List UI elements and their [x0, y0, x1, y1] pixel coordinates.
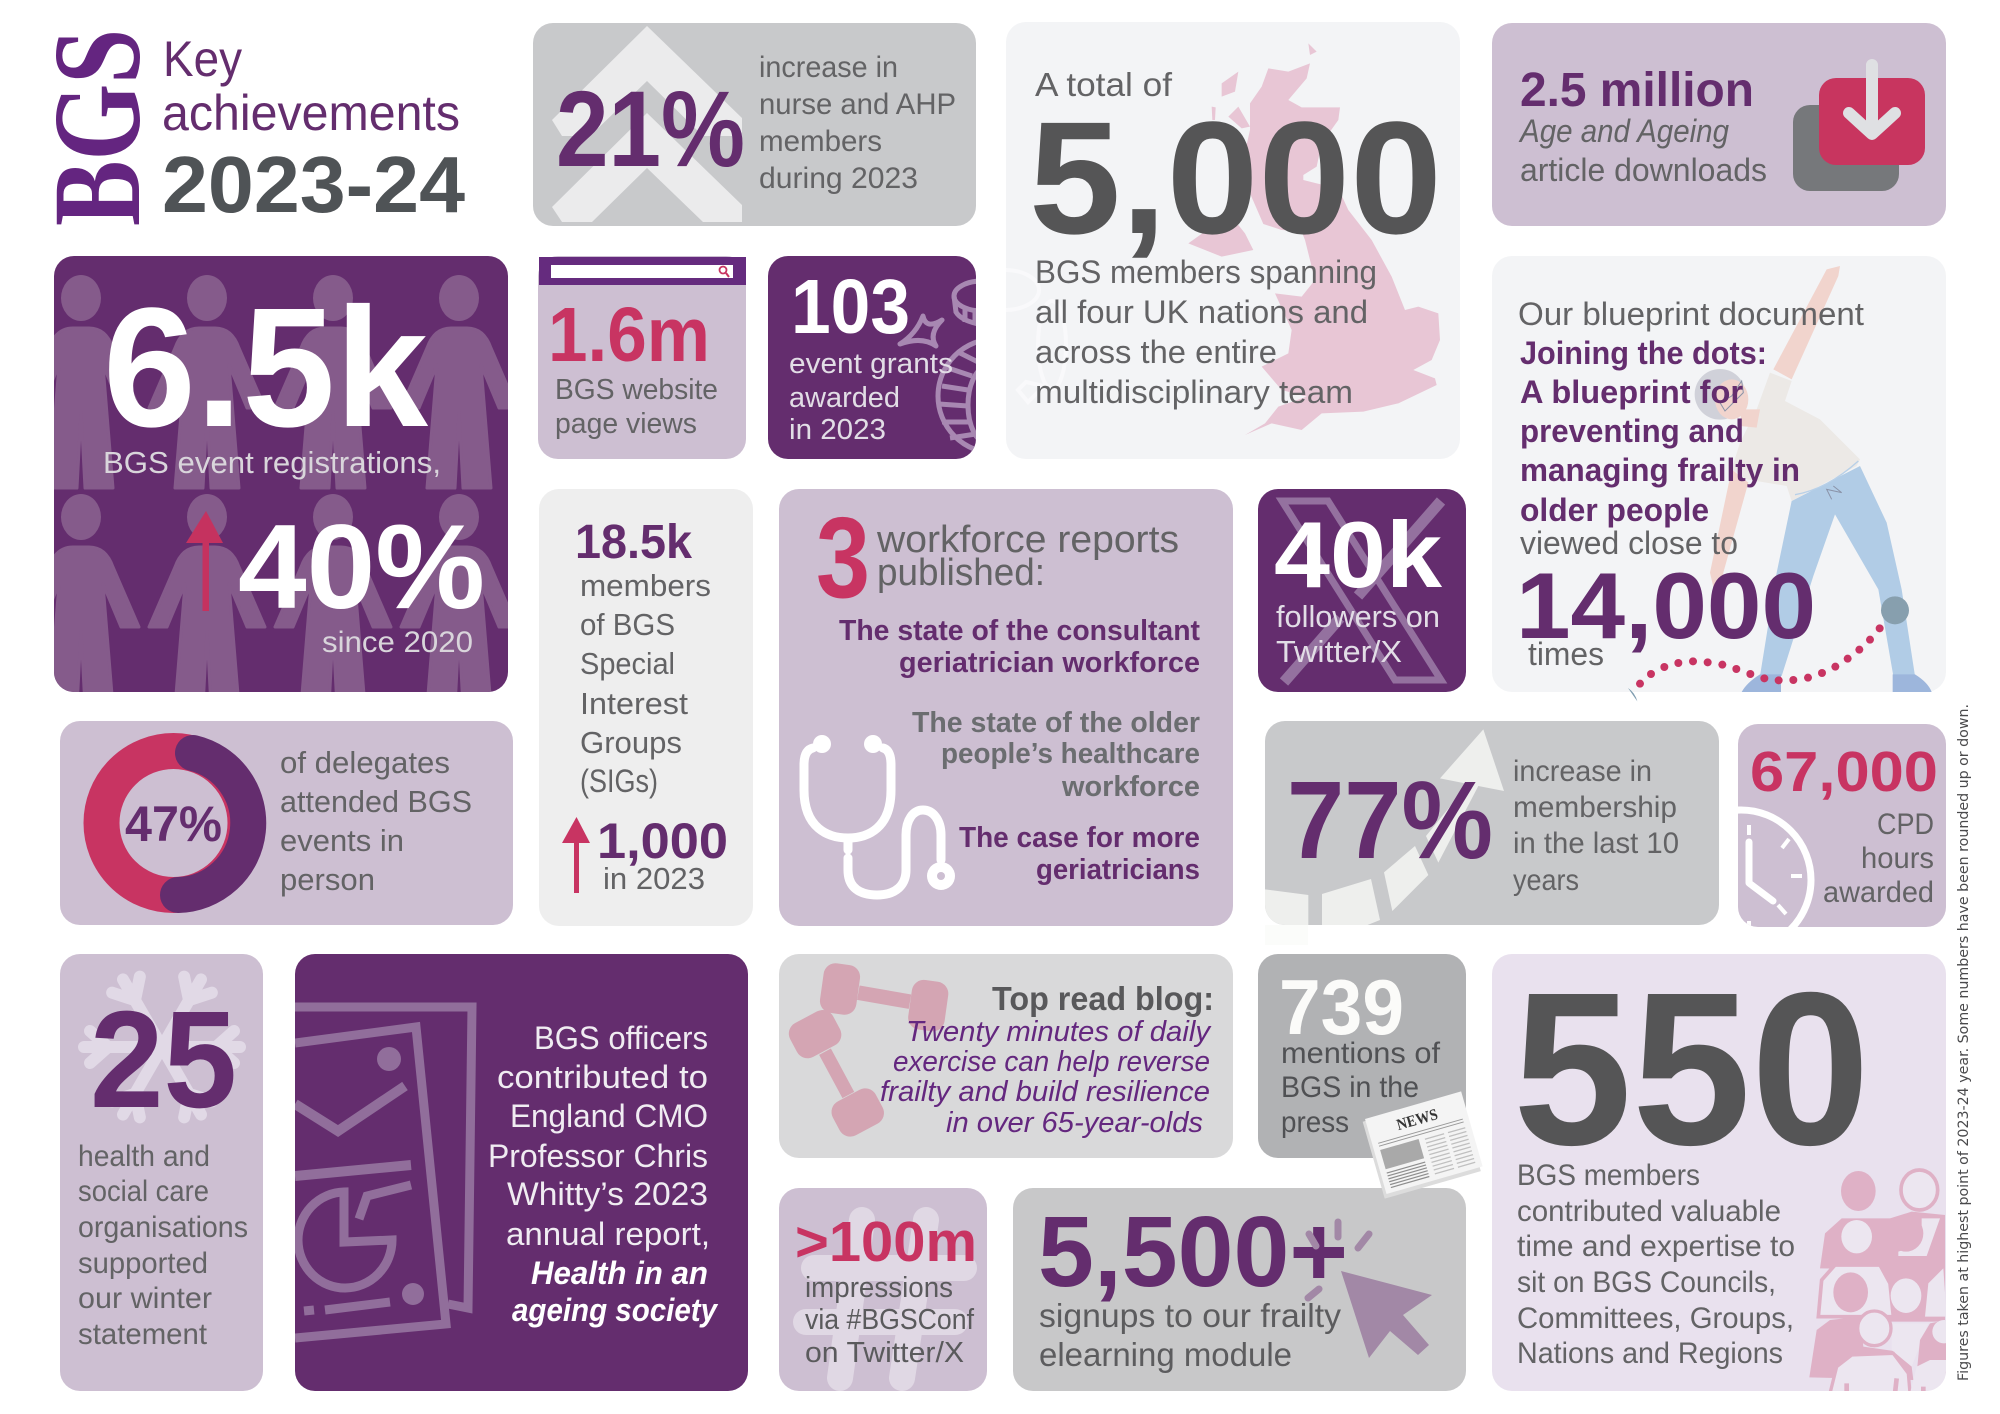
icon: report documents	[295, 1007, 472, 1338]
text: report titles: workforce	[1061, 771, 1200, 803]
icon: hashtag	[806, 1220, 964, 1378]
text: increase description: during 2023	[759, 162, 918, 195]
text: event grants label: event grants	[789, 348, 953, 380]
panel: 550 members contributing	[1492, 948, 1956, 1393]
text: page views label: BGS website	[555, 374, 718, 406]
icon: cursor click	[1308, 1222, 1432, 1358]
stat: >100m: >100m	[795, 1210, 977, 1274]
text: membership description: membership	[1513, 791, 1677, 824]
stat: 550: 550	[1513, 948, 1870, 1191]
text: blueprint intro: Our blueprint document	[1518, 296, 1864, 332]
text: blog title: frailty and build resilience	[880, 1076, 1210, 1108]
title	[162, 31, 466, 229]
icon: snowflake	[84, 971, 240, 1123]
icon: coins and sparkle	[898, 278, 976, 451]
text: CMO report description: Whitty’s 2023	[507, 1176, 708, 1212]
panel: 67,000 CPD hours	[1738, 724, 1946, 927]
icon: faint coin continuation	[971, 270, 1066, 402]
text: page views label: page views	[555, 408, 697, 440]
text: members description: across the entire	[1035, 334, 1277, 370]
text: reports heading	[876, 519, 1179, 594]
panel: top read blog	[779, 954, 1233, 1158]
icon: upward chevrons	[552, 26, 742, 222]
text: report title	[512, 1255, 719, 1328]
icon: people pattern	[23, 275, 517, 707]
stat: 14,000: 14,000	[1516, 553, 1816, 658]
icon: browser search bar	[539, 257, 746, 285]
text: registrations label: BGS event registrations,	[103, 445, 441, 480]
chart: donut 47%	[102, 751, 248, 895]
stat: 5,000: 5,000	[1029, 88, 1442, 267]
text: SIG description: Special	[580, 646, 675, 681]
text: reports heading: workforce reports	[876, 519, 1179, 561]
text: council description	[1517, 1159, 1795, 1370]
icon: clock	[1738, 806, 1814, 927]
panel: >100m impressions	[779, 1188, 987, 1391]
text: viewed close to: viewed close to	[1520, 525, 1738, 561]
text: delegates description: person	[280, 862, 375, 897]
text: blueprint title: older people	[1520, 492, 1709, 528]
stat: 1.6m: 1.6m	[548, 292, 710, 378]
text: CMO report description: Professor Chris	[488, 1138, 708, 1174]
text: CMO report description: contributed to	[497, 1059, 708, 1095]
text: organisations description	[78, 1140, 248, 1351]
text: CPD label: hours	[1861, 842, 1934, 875]
text: impressions label: on Twitter/X	[805, 1337, 964, 1369]
icon: newspaper	[1362, 1091, 1484, 1199]
text: times: times	[1528, 636, 1604, 672]
text: increase description: increase in	[759, 51, 898, 84]
text: increase description	[759, 51, 956, 195]
text: membership description	[1513, 755, 1679, 897]
panel: 25 organisations	[60, 954, 263, 1391]
text: organisations description: social care	[78, 1175, 209, 1208]
text: event grants label	[789, 348, 953, 446]
text: blueprint title: A blueprint for	[1520, 374, 1743, 410]
stat: 5,500+: 5,500+	[1038, 1196, 1348, 1308]
text: council description: sit on BGS Councils,	[1517, 1266, 1776, 1299]
text: followers label: followers on	[1276, 599, 1440, 634]
stat: 40k: 40k	[1274, 502, 1443, 607]
text: delegates description: of delegates	[280, 745, 450, 780]
stat: 6.5k: 6.5k	[103, 273, 428, 463]
text: SIG description: Interest	[580, 686, 688, 721]
text: impressions label	[805, 1272, 975, 1369]
text: followers label	[1276, 599, 1440, 669]
text: blog title	[880, 1016, 1212, 1139]
panel: 77% membership increase	[1265, 721, 1719, 945]
text: blueprint title	[1520, 335, 1800, 528]
icon: dotted trail	[1628, 624, 1884, 701]
stat: 77%: 77%	[1287, 759, 1493, 882]
map: United Kingdom	[1188, 43, 1440, 435]
text: impressions label: impressions	[805, 1272, 953, 1304]
text: membership description: in the last 10	[1513, 827, 1679, 860]
panel: 3 workforce reports	[779, 489, 1233, 926]
text: members description: BGS members spanning	[1035, 254, 1377, 290]
text: blog title: Twenty minutes of daily	[906, 1016, 1212, 1048]
text: report titles	[839, 615, 1200, 886]
text: downloads description: article downloads	[1520, 152, 1767, 188]
text: council description: BGS members	[1517, 1159, 1700, 1192]
panel: 6.5k event registrations	[54, 256, 508, 692]
text: CMO report description: BGS officers	[534, 1020, 708, 1056]
text: signups label	[1039, 1297, 1342, 1373]
text: delegates description	[280, 745, 472, 897]
text: mentions label: BGS in the	[1281, 1071, 1419, 1104]
panel: 5,500+ elearning signups	[1013, 1188, 1466, 1391]
text: SIG description	[580, 568, 711, 799]
text: blueprint title: managing frailty in	[1520, 452, 1800, 488]
text: council description: Nations and Regions	[1517, 1337, 1783, 1370]
panel: 21% nurse and AHP members	[533, 23, 976, 226]
text: CPD label	[1823, 808, 1934, 909]
text: increase description: members	[759, 125, 882, 158]
text: CMO report description: England CMO	[510, 1098, 708, 1134]
text: members description: all four UK nations and	[1035, 294, 1368, 330]
icon: group of people	[1809, 1170, 1956, 1393]
text: membership description: years	[1513, 864, 1579, 897]
panel: 1.6m website page views	[538, 256, 746, 459]
text: council description: Committees, Groups,	[1517, 1302, 1794, 1335]
text: delegates description: events in	[280, 823, 404, 858]
panel: 18.5k SIG members	[539, 489, 753, 926]
text: CPD label: awarded	[1823, 876, 1934, 909]
panel: 739 press mentions	[1258, 954, 1466, 1158]
text: mentions label: press	[1281, 1106, 1349, 1139]
text: report titles: The state of the consultant	[839, 615, 1200, 647]
text: SIG description: (SIGs)	[580, 763, 658, 799]
icon: dumbbells	[785, 962, 950, 1141]
icon: X logo	[1282, 501, 1441, 682]
title: achievements	[162, 85, 460, 141]
icon: newspaper: NEWS	[1395, 1106, 1440, 1134]
icon: faint arrow tail below card	[1265, 925, 1308, 945]
text: impressions label: via #BGSConf	[805, 1304, 975, 1336]
stat: 18.5k: 18.5k	[575, 516, 692, 569]
text: council description: contributed valuable	[1517, 1195, 1781, 1228]
text: signups label: elearning module	[1039, 1336, 1292, 1373]
text: downloads description	[1518, 113, 1767, 188]
text: organisations description: statement	[78, 1318, 208, 1351]
text: organisations description: organisations	[78, 1211, 248, 1244]
text: blueprint title: Joining the dots:	[1520, 335, 1767, 371]
text: report title: Health in an	[531, 1255, 708, 1291]
text: page views label	[555, 374, 718, 440]
text: delegates description: attended BGS	[280, 784, 472, 819]
arrow: increase	[186, 511, 223, 611]
text: blog title: exercise can help reverse	[893, 1046, 1210, 1078]
stat: 3: 3	[816, 494, 870, 622]
text: blog title: in over 65-year-olds	[946, 1107, 1203, 1139]
footnote: Figures taken at highest point of 2023-24 year. Some numbers have been rounded up or down.	[1956, 704, 1972, 1381]
text: blueprint title: preventing and	[1520, 413, 1744, 449]
text: followers label: Twitter/X	[1276, 634, 1402, 669]
text: mentions label	[1281, 1037, 1441, 1139]
stat: 67,000: 67,000	[1750, 740, 1938, 804]
text: reports heading: published:	[877, 552, 1045, 594]
text: report titles: geriatricians	[1036, 854, 1200, 886]
text: membership description: increase in	[1513, 755, 1652, 788]
text: CPD label: CPD	[1877, 808, 1934, 841]
title: Key	[163, 31, 242, 87]
text: increase description: nurse and AHP	[759, 88, 956, 121]
text: event grants label: in 2023	[789, 414, 886, 446]
panel: 47% in person	[60, 721, 513, 925]
text: since 2020: since 2020	[322, 626, 473, 659]
text: in 2023: in 2023	[603, 861, 705, 896]
text: blog heading: Top read blog:	[992, 980, 1214, 1017]
panel: CMO annual report	[295, 954, 748, 1391]
panel: 103 event grants	[768, 256, 976, 459]
title: 2023-24	[162, 140, 466, 229]
text: event grants label: awarded	[789, 382, 900, 414]
text: a total of: A total of	[1035, 66, 1173, 103]
text: report title: ageing society	[512, 1292, 719, 1328]
text: downloads description: Age and Ageing	[1518, 113, 1729, 149]
text: CMO report description: annual report,	[506, 1216, 710, 1252]
stat: 2.5 million: 2.5 million	[1520, 64, 1754, 117]
panel: 2.5 million downloads	[1492, 23, 1946, 226]
panel: 40k followers	[1258, 489, 1466, 692]
arrow: increase	[562, 817, 590, 893]
text: members description	[1035, 254, 1377, 410]
panel: 5,000 BGS members	[971, 22, 1460, 459]
text: report titles: people’s healthcare	[941, 738, 1200, 770]
text: council description: time and expertise to	[1517, 1230, 1795, 1263]
panel: blueprint document	[1492, 256, 1946, 701]
stat: 47%: 47%	[125, 796, 222, 852]
stat: 40%: 40%	[238, 500, 485, 634]
illustration: stretching older person	[1695, 266, 1932, 692]
text: mentions label: mentions of	[1281, 1037, 1441, 1070]
icon: growth arrow	[1265, 729, 1504, 943]
stat: 21%: 21%	[556, 68, 745, 189]
text: SIG description: members	[580, 568, 711, 603]
stat: 1,000: 1,000	[597, 813, 728, 869]
text: report titles: geriatrician workforce	[899, 647, 1200, 679]
text: report titles: The case for more	[959, 822, 1200, 854]
text: SIG description: of BGS	[580, 607, 675, 642]
text: signups label: signups to our frailty	[1039, 1297, 1342, 1334]
icon: stethoscope	[804, 735, 955, 895]
stat: 25: 25	[90, 983, 237, 1137]
text: organisations description: supported	[78, 1247, 208, 1280]
stat: 103: 103	[791, 264, 910, 350]
text: CMO report description	[488, 1020, 710, 1252]
stat: 739: 739	[1279, 963, 1404, 1051]
text: SIG description: Groups	[580, 725, 682, 760]
text: organisations description: health and	[78, 1140, 210, 1173]
icon: download	[1793, 65, 1925, 191]
text: organisations description: our winter	[78, 1282, 212, 1315]
text: report titles: The state of the older	[912, 707, 1200, 739]
text: members description: multidisciplinary team	[1035, 374, 1353, 410]
